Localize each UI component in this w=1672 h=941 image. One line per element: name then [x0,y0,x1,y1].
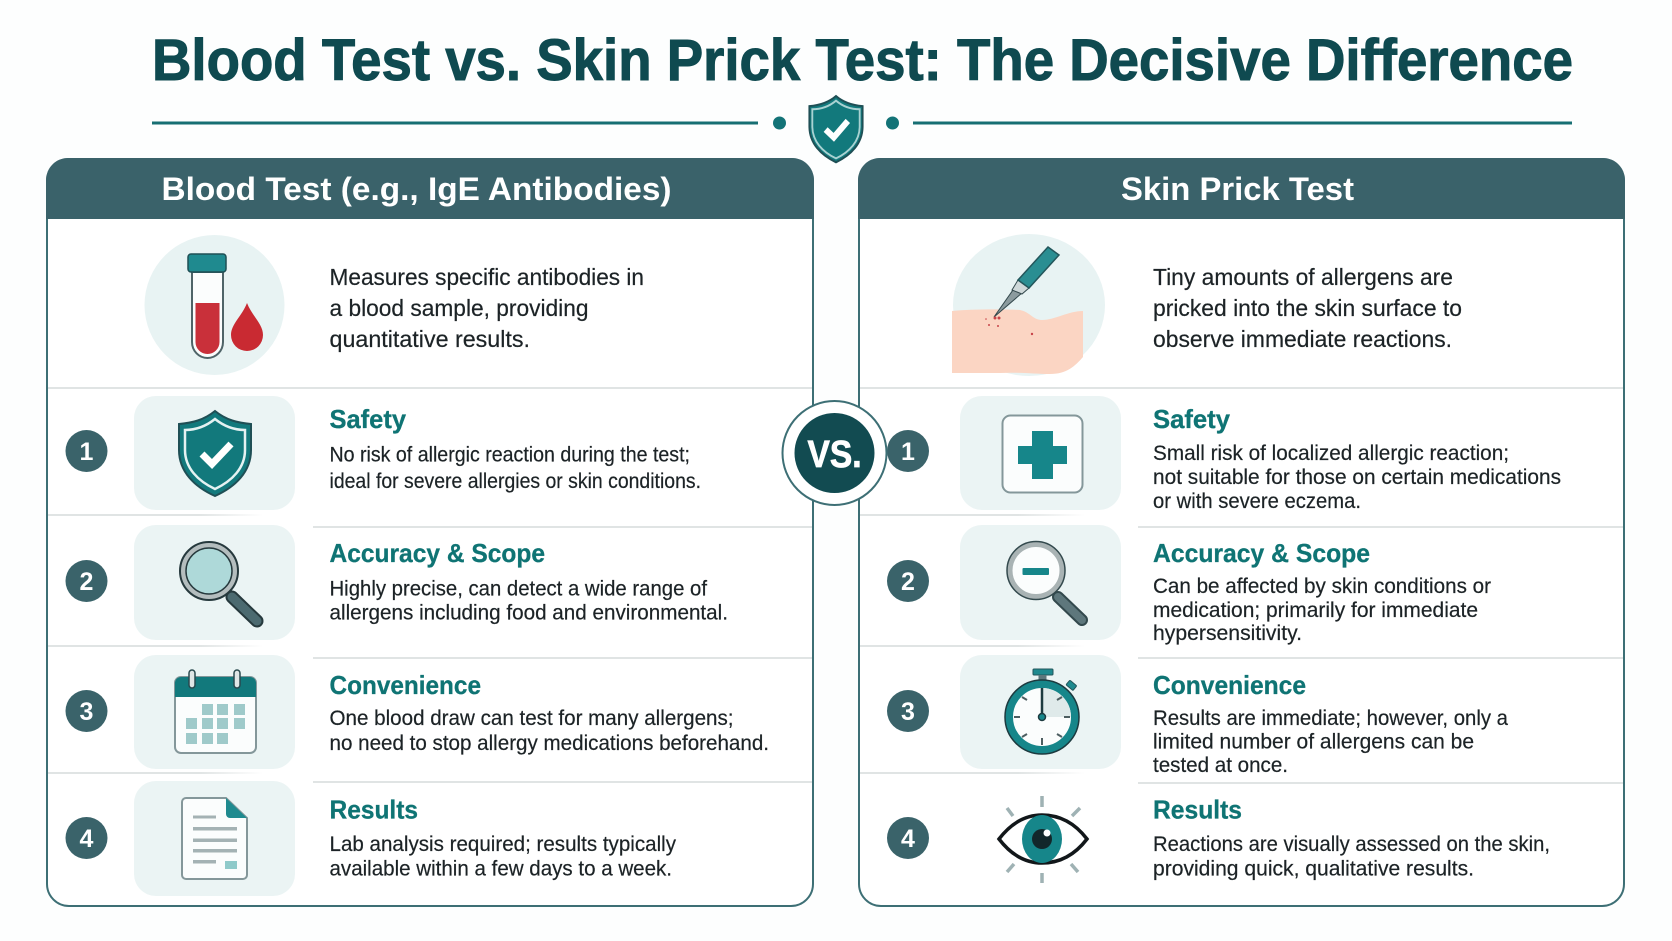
row 3: convenience [66,655,769,769]
panel header: blood test [46,158,814,219]
vs badge [782,401,886,505]
icon: calendar [134,655,295,769]
icon: magnifying glass with minus [960,525,1121,640]
number badge 2 [66,560,108,602]
text: convenience: limited number of allergens can be [1153,730,1474,754]
number badge 3: 3 [80,698,93,726]
text: results [1153,833,1550,880]
text: safety: No risk of allergic reaction during the test; [330,444,690,466]
text: accuracy and scope: allergens including food and environmental. [330,602,728,624]
number badge 1 [887,430,929,472]
text: results [330,833,676,880]
text: accuracy and scope: medication; primarily for immediate [1153,599,1478,622]
panel header: skin prick test: Skin Prick Test [1121,171,1354,207]
title: Blood Test vs. Skin Prick Test: The Decisive Difference [152,28,1573,93]
heading: safety: Safety [1153,404,1231,434]
number badge 4: 4 [901,825,915,853]
number badge 1: 1 [901,438,915,466]
vs badge: VS. [808,434,862,476]
panel header: skin prick test [858,158,1625,219]
icon: test tube and blood drop [144,235,284,375]
panel: blood test [46,158,814,906]
text: safety: Small risk of localized allergic reaction; [1153,442,1509,465]
intro text: blood test: quantitative results. [330,326,530,352]
icon: shield check [134,396,295,510]
text: accuracy and scope: hypersensitivity. [1153,622,1302,645]
icon: eye [999,796,1087,883]
text: safety [330,444,701,493]
text: safety [1153,442,1561,513]
text: results: providing quick, qualitative results. [1153,858,1474,880]
number badge 3 [66,690,108,732]
heading: accuracy and scope: Accuracy & Scope [330,538,545,568]
number badge 2 [887,560,929,602]
heading: convenience: Convenience [330,670,481,700]
intro text: skin prick test: pricked into the skin surface to [1153,295,1462,321]
text: convenience: One blood draw can test for many allergens; [330,707,734,730]
row 4: results [66,781,676,896]
number badge 2: 2 [80,568,93,596]
number badge 3 [887,690,929,732]
number badge 3: 3 [901,698,915,726]
text: convenience: no need to stop allergy medications beforehand. [330,732,769,755]
heading: convenience: Convenience [1153,670,1306,700]
icon: document [134,781,295,896]
row 1: safety [887,396,1561,513]
panel: skin prick test [858,158,1625,906]
intro text: blood test [330,264,644,352]
text: results: Lab analysis required; results typically [330,833,676,856]
number badge 1 [66,430,108,472]
text: convenience: Results are immediate; however, only a [1153,707,1508,730]
icon: stopwatch [960,655,1121,769]
intro text: skin prick test: observe immediate reactions. [1153,326,1452,352]
intro text: blood test: Measures specific antibodies in [330,264,644,290]
intro text: skin prick test [1153,264,1462,352]
text: results: available within a few days to a week. [330,858,672,880]
icon: lancet pricking skin [952,234,1105,376]
text: accuracy and scope [330,578,728,624]
icon: magnifying glass [134,525,295,640]
number badge 4: 4 [80,825,94,853]
number badge 2: 2 [901,568,915,596]
intro text: skin prick test: Tiny amounts of allergens are [1153,264,1453,290]
panel header: blood test: Blood Test (e.g., IgE Antibodies) [162,171,672,207]
text: safety: ideal for severe allergies or skin conditions. [330,470,701,493]
heading: results: Results [1153,794,1242,824]
row 2: accuracy and scope [887,525,1491,645]
heading: accuracy and scope: Accuracy & Scope [1153,538,1370,568]
number badge 4 [887,817,929,859]
text: safety: or with severe eczema. [1153,490,1361,513]
row 3: convenience [887,655,1508,777]
text: accuracy and scope [1153,575,1491,645]
heading: results: Results [330,794,418,824]
text: accuracy and scope: Can be affected by skin conditions or [1153,575,1491,598]
row 2: accuracy and scope [66,525,728,640]
title divider with shield [152,96,1572,162]
row 4: results [887,794,1550,883]
text: accuracy and scope: Highly precise, can detect a wide range of [330,578,707,600]
number badge 4 [66,817,108,859]
text: convenience: tested at once. [1153,754,1288,777]
text: safety: not suitable for those on certain medications [1153,466,1561,489]
heading: safety: Safety [330,404,407,434]
intro text: blood test: a blood sample, providing [330,295,588,321]
text: convenience [1153,707,1508,777]
number badge 1: 1 [80,438,94,466]
icon: medical cross [960,396,1121,510]
text: convenience [330,707,769,755]
text: results: Reactions are visually assessed on the skin, [1153,833,1550,856]
row 1: safety [66,396,701,510]
